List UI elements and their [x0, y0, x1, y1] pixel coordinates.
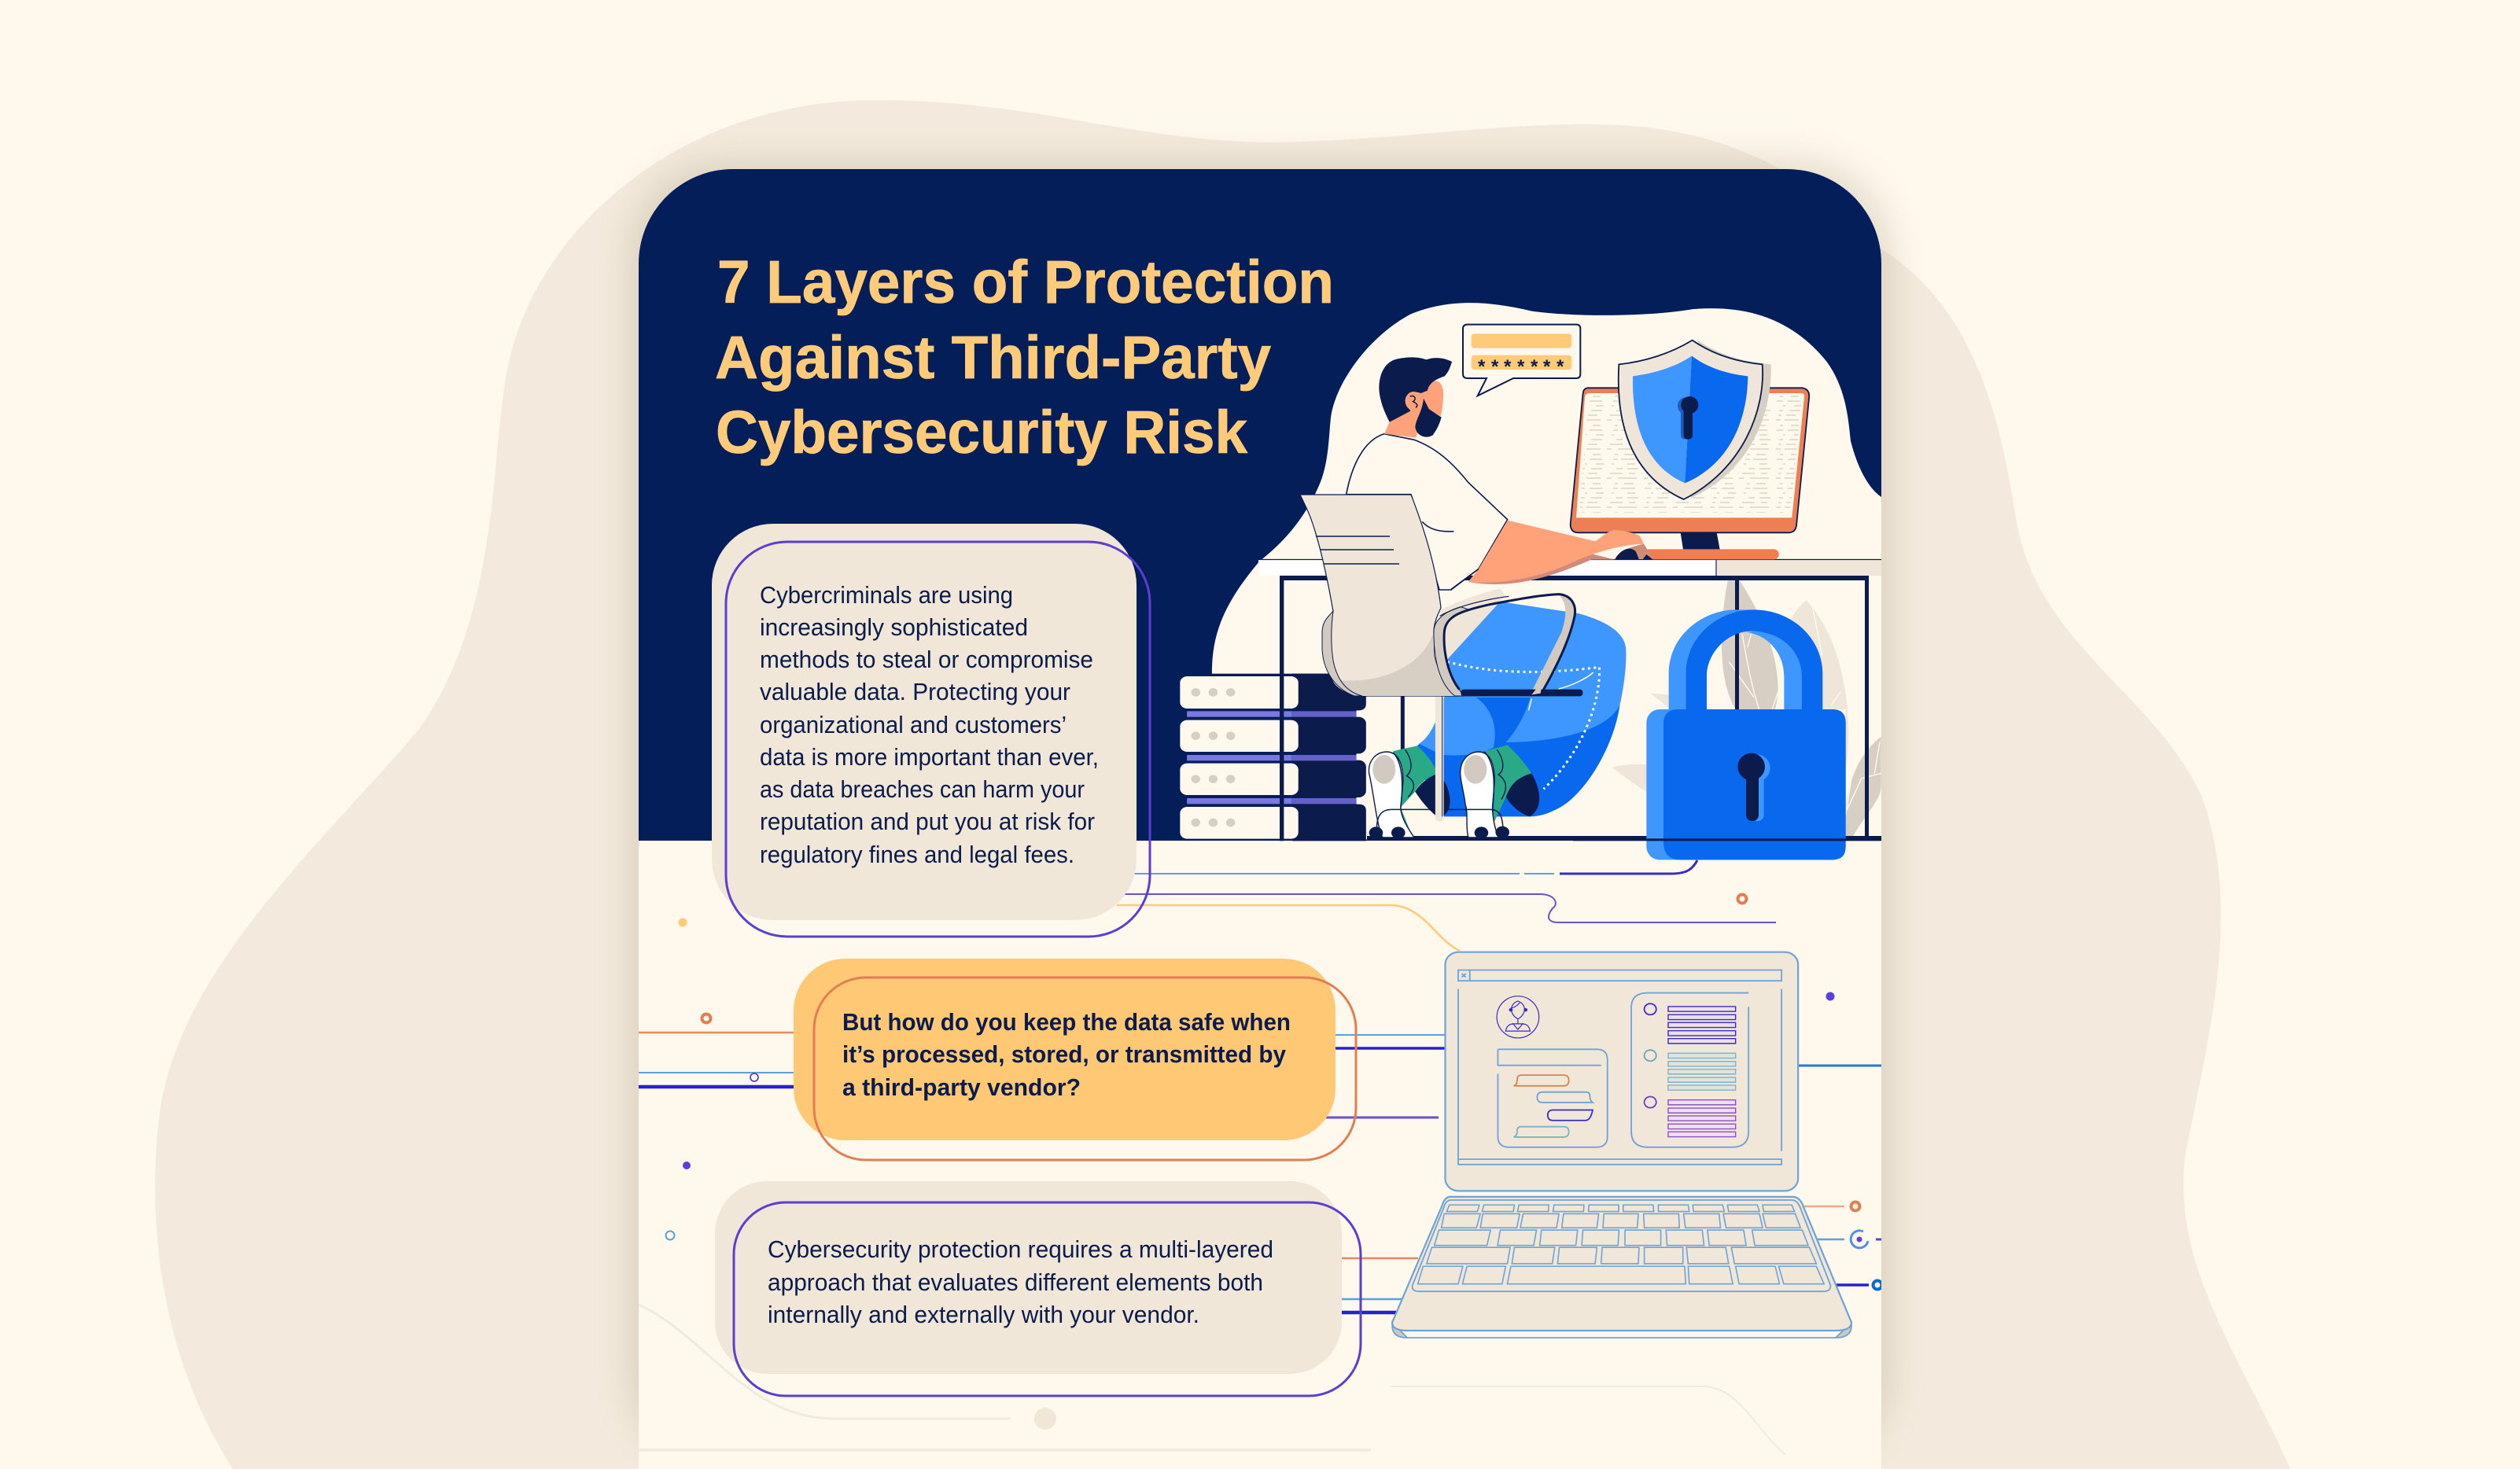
background leaves	[1612, 580, 1881, 838]
cream blob backdrop	[1212, 303, 1881, 839]
connector lines and dots	[639, 860, 1881, 1455]
conclusion text	[768, 1235, 1273, 1328]
intro text: data is more important than ever,	[760, 743, 1099, 771]
chair pole	[1435, 696, 1444, 822]
list panel	[1631, 993, 1748, 1147]
chat panel	[1498, 1049, 1608, 1147]
intro text: regulatory fines and legal fees.	[760, 841, 1074, 868]
title: Cybersecurity Risk	[716, 399, 1247, 466]
lap and armrest	[1434, 588, 1582, 696]
question text	[842, 1008, 1291, 1101]
question text: But how do you keep the data safe when	[842, 1008, 1291, 1036]
head	[1379, 357, 1452, 438]
intro text: Cybercriminals are using	[760, 581, 1013, 609]
chair back	[1300, 495, 1458, 696]
conclusion text: internally and externally with your vendor.	[768, 1301, 1199, 1328]
laptop screen	[1445, 952, 1798, 1191]
chair leg	[1401, 696, 1405, 751]
navy header	[639, 169, 1881, 841]
question text: a third-party vendor?	[842, 1073, 1081, 1101]
laptop	[1392, 952, 1851, 1338]
monitor	[1571, 388, 1809, 559]
padlock	[1573, 609, 1881, 860]
intro text	[760, 581, 1099, 868]
keyboard base	[1392, 1197, 1851, 1338]
panel: intro	[712, 524, 1150, 937]
legs and shoes	[1369, 602, 1626, 839]
avatar icon	[1497, 996, 1539, 1038]
conclusion text: Cybersecurity protection requires a multi-layered	[768, 1235, 1273, 1263]
background blob	[155, 100, 2290, 1469]
shirt	[1347, 434, 1508, 590]
intro text: reputation and put you at risk for	[760, 808, 1095, 835]
question text: it’s processed, stored, or transmitted by	[842, 1040, 1287, 1068]
shield	[1619, 341, 1771, 499]
intro text: as data breaches can harm your	[760, 775, 1085, 803]
intro text: increasingly sophisticated	[760, 613, 1028, 641]
shoe toes	[1415, 773, 1539, 816]
trousers	[1416, 602, 1626, 816]
panel: conclusion	[715, 1181, 1361, 1396]
intro text: valuable data. Protecting your	[760, 678, 1070, 705]
shoes	[1369, 749, 1509, 839]
illustration: desk scene	[1180, 303, 1881, 860]
panel: question callout	[794, 959, 1356, 1160]
title: 7 Layers of Protection	[717, 249, 1334, 316]
conclusion text: approach that evaluates different elements both	[768, 1268, 1263, 1296]
password asterisks: *******	[1478, 356, 1564, 377]
monitor code texture	[1579, 396, 1803, 513]
keyboard keys	[1418, 1205, 1824, 1284]
intro text: organizational and customers’	[760, 711, 1067, 738]
speech bubble	[1463, 325, 1580, 396]
intro text: methods to steal or compromise	[760, 646, 1093, 673]
server stack	[1180, 576, 1368, 841]
card	[639, 169, 1881, 1469]
desk frame	[1280, 576, 1881, 841]
socks	[1393, 745, 1531, 838]
title	[715, 249, 1334, 466]
card shadow	[629, 161, 1891, 1469]
title: Against Third-Party	[715, 324, 1271, 392]
arm and hand	[1451, 521, 1653, 589]
desk top	[1258, 560, 1881, 576]
